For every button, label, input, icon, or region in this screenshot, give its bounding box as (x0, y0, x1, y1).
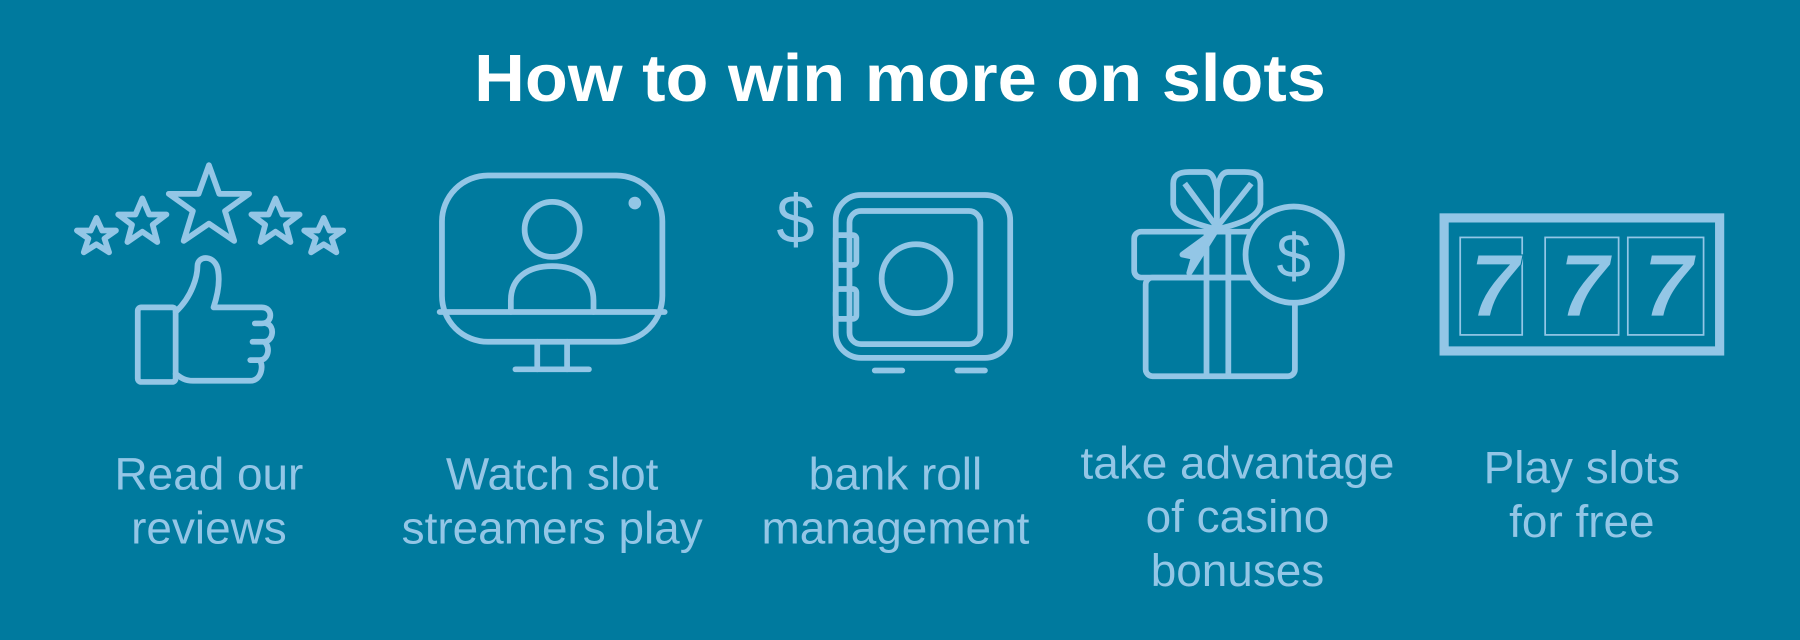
panel: reviews (77, 165, 343, 554)
panel: streamers (402, 175, 703, 554)
icon: slot machine 777: 7 (1470, 236, 1524, 336)
label: bank roll management: management (761, 502, 1030, 554)
label: take advantage of casino bonuses: bonuses (1151, 544, 1324, 596)
panel: free play (1444, 218, 1720, 547)
panel: bonuses (1081, 172, 1394, 596)
icon: stars and thumbs up (77, 165, 343, 382)
label: take advantage of casino bonuses: of casino (1146, 490, 1329, 542)
icon: safe with dollar (836, 195, 1010, 370)
label: Watch slot streamers play: Watch slot (446, 448, 659, 500)
label: Watch slot streamers play: streamers play (402, 502, 703, 554)
icon: slot machine 777: 7 (1643, 236, 1697, 336)
icon: slot machine 777 (1444, 218, 1720, 351)
icon: gift with coin (1134, 172, 1342, 376)
panel: bankroll (761, 181, 1030, 554)
icon: monitor with person (440, 175, 665, 369)
label: Read our reviews: Read our (115, 448, 303, 500)
label: take advantage of casino bonuses: take advantage (1081, 436, 1394, 488)
label: Play slots for free: Play slots (1484, 441, 1680, 493)
label: bank roll management: bank roll (809, 448, 982, 500)
icon: slot machine 777: 7 (1559, 236, 1613, 336)
label: Read our reviews: reviews (131, 502, 287, 554)
panel: bankroll: $ (776, 181, 815, 258)
label: Play slots for free: for free (1509, 495, 1655, 547)
title: How to win more on slots (474, 42, 1326, 116)
panel: bonuses: $ (1277, 223, 1311, 292)
